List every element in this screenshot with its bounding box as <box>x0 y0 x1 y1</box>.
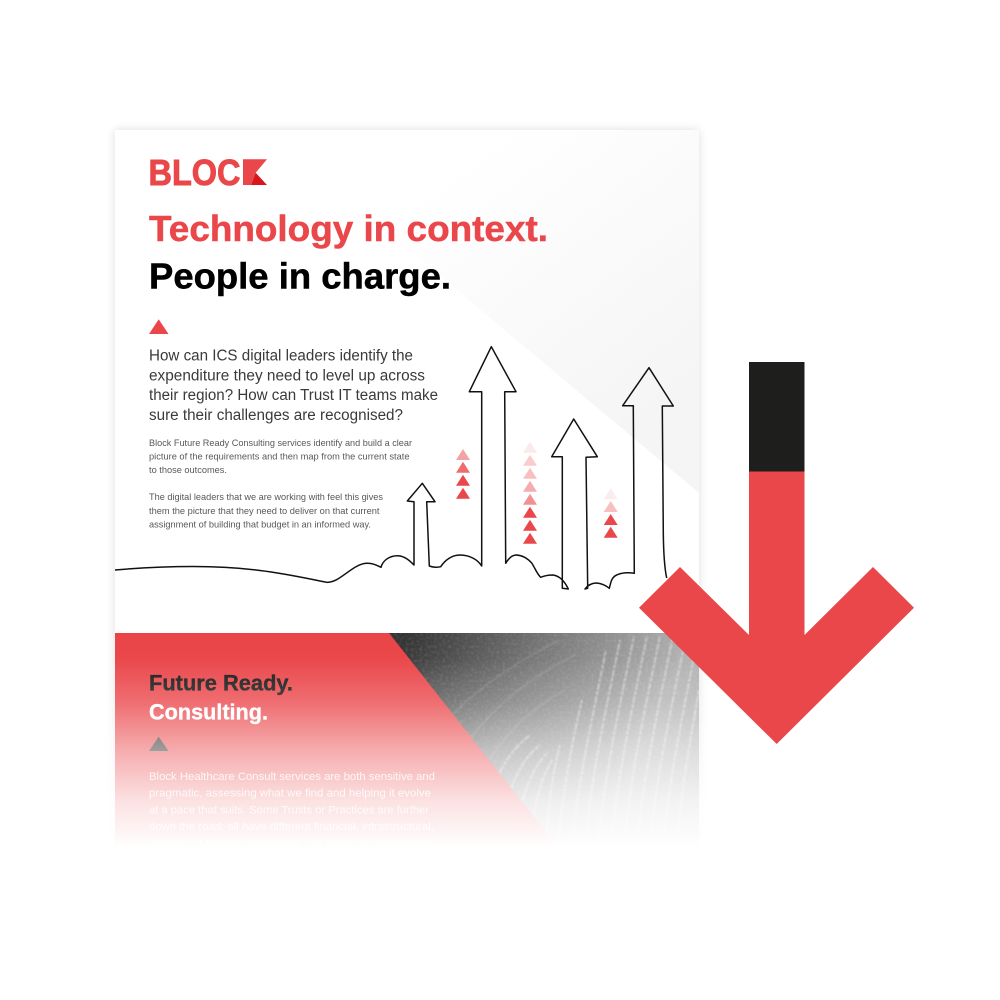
text block: digital leaders feedback: them the picture that they need to deliver on that current <box>149 506 380 516</box>
text block: healthcare consult description: at a pace that suits. Some Trusts or Practices are further <box>149 804 429 816</box>
icon: grey triangle marker <box>149 737 168 751</box>
panel: document preview <box>95 130 720 868</box>
text block: consulting services intro: Block Future Ready Consulting services identify and build a clear <box>149 438 412 448</box>
heading: people in charge: People in charge. <box>149 256 451 296</box>
text block: healthcare consult description: pragmatic, assessing what we find and helping it evolve <box>149 788 431 800</box>
text block: healthcare consult description <box>149 771 435 849</box>
triangle column: right stack <box>604 488 618 538</box>
triangle column: short stack <box>456 449 470 499</box>
heading: technology in context: Technology in context. <box>149 208 548 249</box>
text block: lead question: How can ICS digital leaders identify the <box>149 348 413 364</box>
image: fingerprint <box>389 633 699 828</box>
illustration: hand-drawn rising arrows <box>115 347 673 589</box>
text block: digital leaders feedback: assignment of building that budget in an informed way. <box>149 520 371 530</box>
text block: consulting services intro <box>149 438 412 475</box>
heading: future ready: Future Ready. <box>149 670 293 696</box>
heading: consulting: Consulting. <box>149 700 268 724</box>
logo: Block: BLOC <box>148 152 240 193</box>
panel: future ready consulting band <box>112 633 702 853</box>
fade overlay <box>95 633 720 868</box>
text block: lead question <box>149 348 438 424</box>
text block: digital leaders feedback <box>149 492 383 530</box>
text block: healthcare consult description: down the road; all have different financial, infrastructural, <box>149 821 434 833</box>
arrow: large download arrow <box>639 362 914 744</box>
text block: consulting services intro: to those outcomes. <box>149 465 227 475</box>
text block: healthcare consult description: Block Healthcare Consult services are both sensitive and <box>149 771 435 783</box>
icon: red triangle marker <box>149 319 168 334</box>
text block: lead question: expenditure they need to level up across <box>149 368 425 384</box>
text block: consulting services intro: picture of the requirements and then map from the current state <box>149 451 410 461</box>
text block: lead question: sure their challenges are recognised? <box>149 407 403 424</box>
text block: digital leaders feedback: The digital leaders that we are working with feel this gives <box>149 492 383 502</box>
text block: healthcare consult description: capacity or training challenges. We apply the approaches <box>149 837 433 849</box>
text block: lead question: their region? How can Trust IT teams make <box>149 387 438 404</box>
triangle column: tall stack <box>523 442 537 544</box>
